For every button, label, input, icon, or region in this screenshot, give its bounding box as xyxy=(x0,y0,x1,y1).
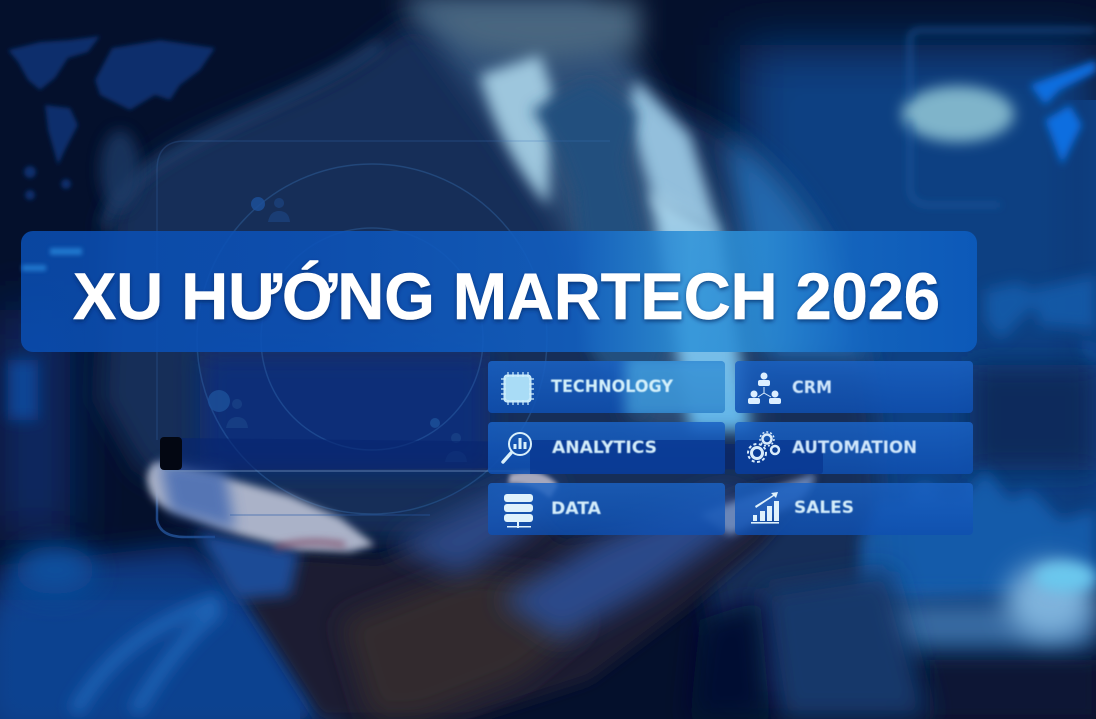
tile: automation xyxy=(735,422,973,474)
ring finger tip xyxy=(700,473,815,535)
sleeve bottom fill xyxy=(0,600,320,719)
person glyphs xyxy=(226,198,461,441)
suit body xyxy=(100,20,895,700)
button grid xyxy=(488,355,973,535)
lower right band xyxy=(840,605,1096,647)
middle finger xyxy=(500,490,751,640)
left chart bars xyxy=(8,360,38,420)
icon: gears xyxy=(748,432,779,462)
hand lower warm tone xyxy=(340,570,590,719)
lapel highlight xyxy=(105,45,380,225)
sleeve glow xyxy=(15,546,95,594)
shirt collar xyxy=(405,0,760,430)
band glow bits xyxy=(22,248,82,271)
extended thumb xyxy=(147,462,375,552)
icon: magnifier xyxy=(503,433,531,462)
suit lapel right xyxy=(725,135,870,360)
icon: chip xyxy=(501,372,534,405)
thumb blue overlay xyxy=(160,462,235,530)
lower body xyxy=(760,570,930,719)
thumb red tint xyxy=(275,542,345,548)
index finger xyxy=(390,478,560,575)
tile: automation: AUTOMATION xyxy=(792,438,917,458)
blurred bar chart xyxy=(860,470,1096,600)
right dark lower gradient xyxy=(970,365,1096,470)
right glow cyan xyxy=(1034,562,1096,592)
shoulder haze xyxy=(100,130,140,210)
tile: technology: TECHNOLOGY xyxy=(551,377,674,397)
network rings xyxy=(157,141,610,537)
suit mid-chest blue xyxy=(200,352,490,470)
right edge blue fade xyxy=(1070,100,1096,580)
sleeve highlights xyxy=(75,600,220,712)
tile: analytics: ANALYTICS xyxy=(552,438,657,458)
sleeve base edge xyxy=(0,560,300,719)
finger tip highlight xyxy=(508,471,558,498)
tile: sales: SALES xyxy=(794,498,854,518)
lower right dark corner xyxy=(930,660,1096,719)
title band xyxy=(21,231,977,352)
tile: data xyxy=(488,483,725,535)
tile: technology xyxy=(488,355,740,420)
right background glow blob xyxy=(902,86,1014,142)
shirt lower bright xyxy=(650,190,750,430)
tile: data: DATA xyxy=(551,499,602,519)
ring node dots xyxy=(208,197,440,428)
world map left xyxy=(8,36,215,200)
phone outline xyxy=(230,514,430,516)
collar bright edge xyxy=(480,55,552,205)
right lower world map xyxy=(985,275,1096,370)
tile: crm xyxy=(735,361,973,413)
band panel xyxy=(21,231,977,352)
icon: org chart xyxy=(748,372,781,404)
right world map pieces xyxy=(1030,60,1096,165)
icon: growth bars xyxy=(751,492,779,524)
right glow lower xyxy=(1006,562,1094,638)
right collar xyxy=(628,80,720,235)
neck glow xyxy=(395,0,640,60)
icon: server stack xyxy=(504,494,533,528)
title: XU HƯỚNG MARTECH 2026 xyxy=(73,259,940,333)
right frame lines xyxy=(910,30,1096,205)
sleeve lower left xyxy=(0,545,340,719)
right side blue backdrop xyxy=(740,45,1096,635)
thumb blue wash xyxy=(195,530,300,600)
tile: crm: CRM xyxy=(792,378,832,398)
phone line xyxy=(165,470,530,472)
hand palm xyxy=(225,475,815,719)
dark strip near hand xyxy=(690,600,770,719)
tile: analytics xyxy=(488,422,725,474)
left edge blue haze xyxy=(0,310,70,540)
tie xyxy=(526,84,662,361)
tile: sales xyxy=(735,483,973,535)
phone xyxy=(180,438,822,470)
phone edge xyxy=(160,437,182,470)
